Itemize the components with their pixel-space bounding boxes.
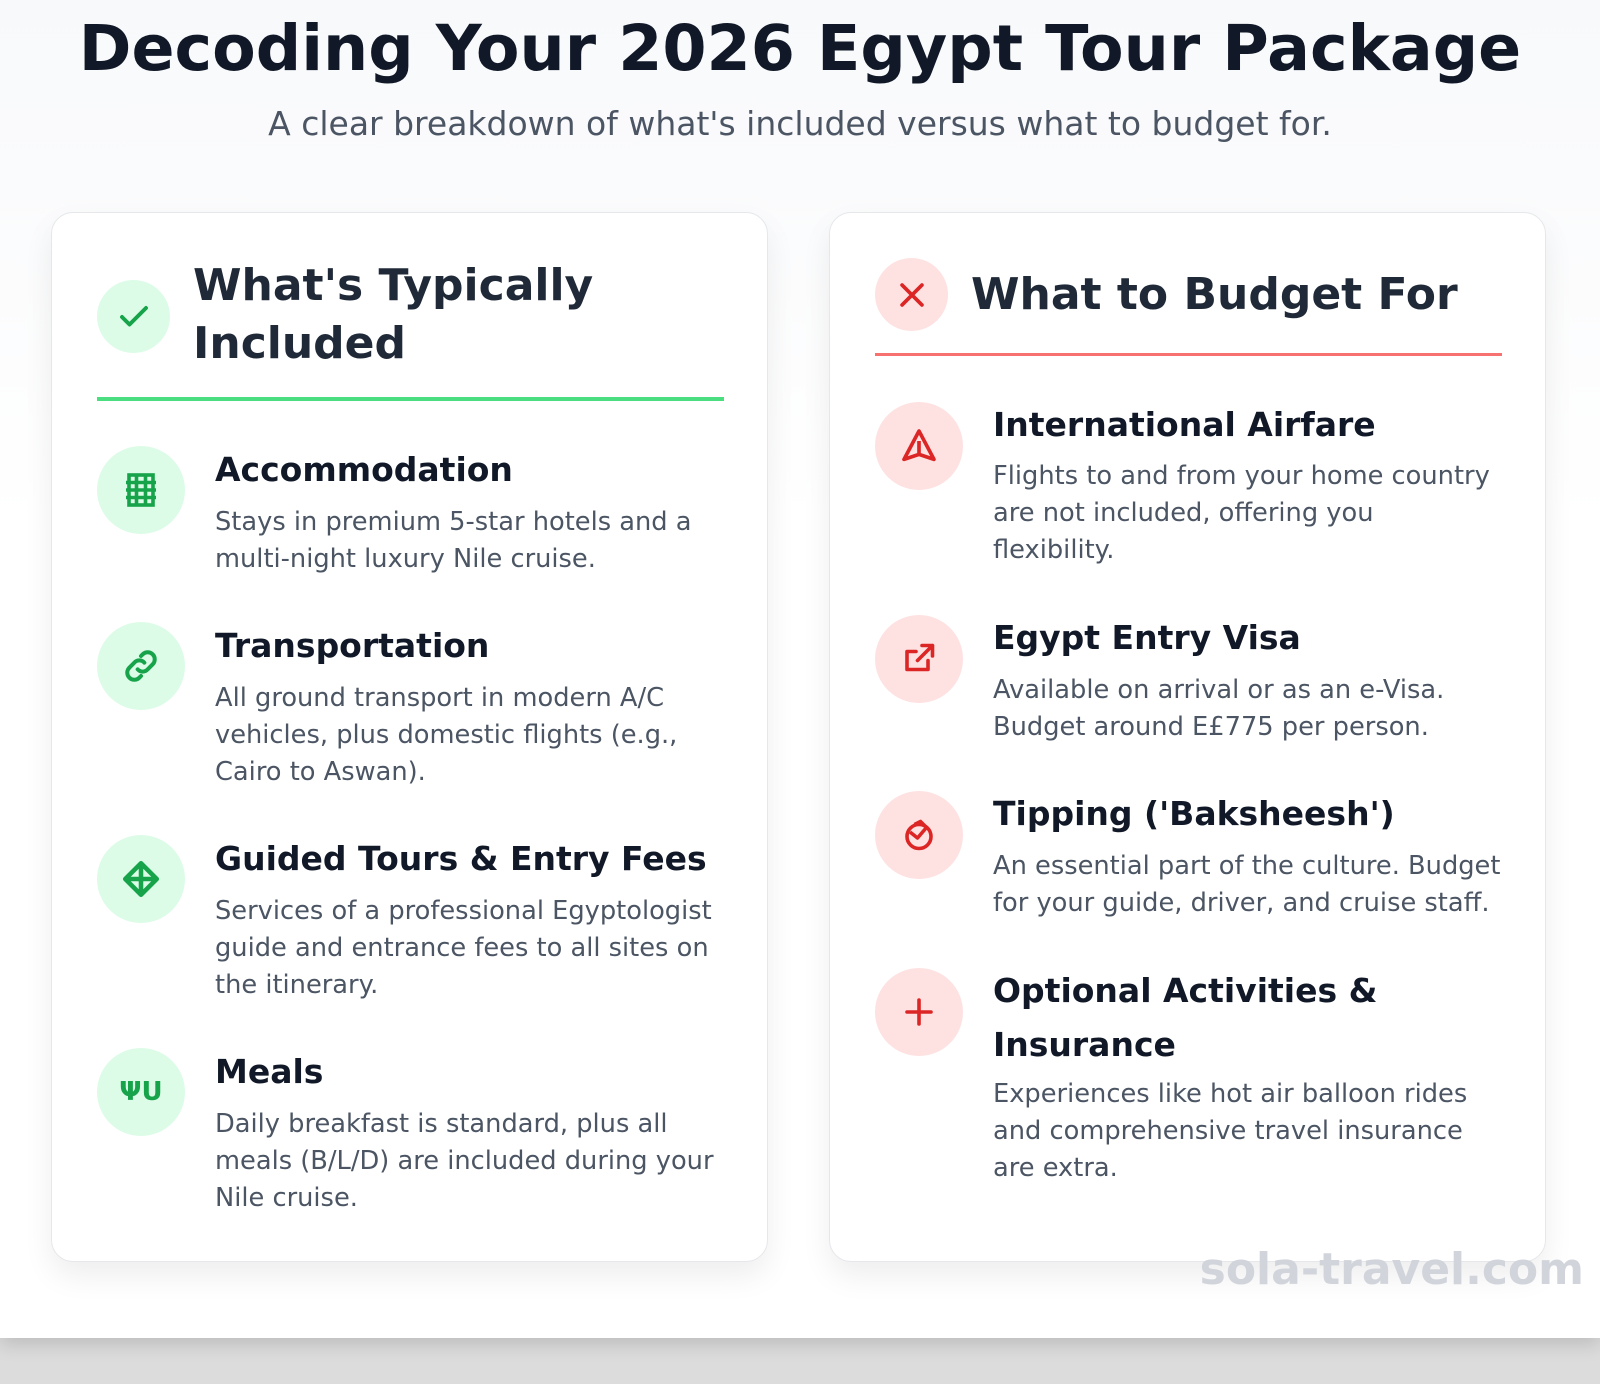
item: guided tours: Services of a professional Egyptologist guide and entrance fees to all sites on the itinerary.: [215, 896, 712, 1000]
item: visa: Egypt Entry Visa: [993, 618, 1301, 657]
item: accommodation: [97, 446, 692, 574]
item: airfare: International Airfare: [993, 405, 1376, 444]
item: transportation: Transportation: [215, 626, 489, 665]
item: accommodation: Accommodation: [215, 450, 513, 489]
item: transportation: All ground transport in modern A/C vehicles, plus domestic flights (e.g., Cairo to Aswan).: [215, 683, 677, 787]
item: optional: Optional Activities & Insurance: [993, 971, 1377, 1064]
item: tipping: [875, 791, 1500, 918]
item: optional: Experiences like hot air balloon rides and comprehensive travel insurance are extra.: [993, 1079, 1467, 1183]
icon: check: [97, 280, 170, 353]
item: guided tours: Guided Tours & Entry Fees: [215, 839, 707, 878]
title: Decoding Your 2026 Egypt Tour Package: [79, 11, 1521, 85]
heading: included: [193, 260, 593, 369]
item: meals: ΨU: [119, 1077, 163, 1107]
item: guided tours: [97, 835, 712, 1000]
item: accommodation: Stays in premium 5-star hotels and a multi-night luxury Nile cruise.: [215, 507, 692, 574]
item: meals: Meals: [215, 1052, 323, 1091]
heading: included: What's Typically: [193, 260, 593, 311]
item: visa: Available on arrival or as an e-Visa. Budget around E£775 per person.: [993, 675, 1444, 742]
item: visa: [875, 615, 1444, 742]
item: meals: Daily breakfast is standard, plus all meals (B/L/D) are included during your Nile cruise.: [215, 1109, 714, 1213]
panel: budget: [829, 212, 1546, 1262]
subtitle: A clear breakdown of what's included versus what to budget for.: [268, 104, 1332, 143]
panel: included: [51, 212, 768, 1262]
watermark: sola-travel.com: [1200, 1244, 1584, 1295]
item: airfare: [875, 402, 1490, 565]
item: transportation: [97, 622, 677, 787]
item: optional: [875, 968, 1467, 1183]
item: tipping: An essential part of the culture. Budget for your guide, driver, and cruise staff.: [993, 851, 1500, 918]
icon: x: [875, 258, 948, 331]
heading: budget: What to Budget For: [971, 269, 1458, 320]
item: tipping: Tipping ('Baksheesh'): [993, 794, 1395, 833]
item: airfare: Flights to and from your home country are not included, offering you flexibility.: [993, 461, 1490, 565]
item: meals: [97, 1048, 714, 1213]
heading: included: Included: [193, 318, 406, 369]
